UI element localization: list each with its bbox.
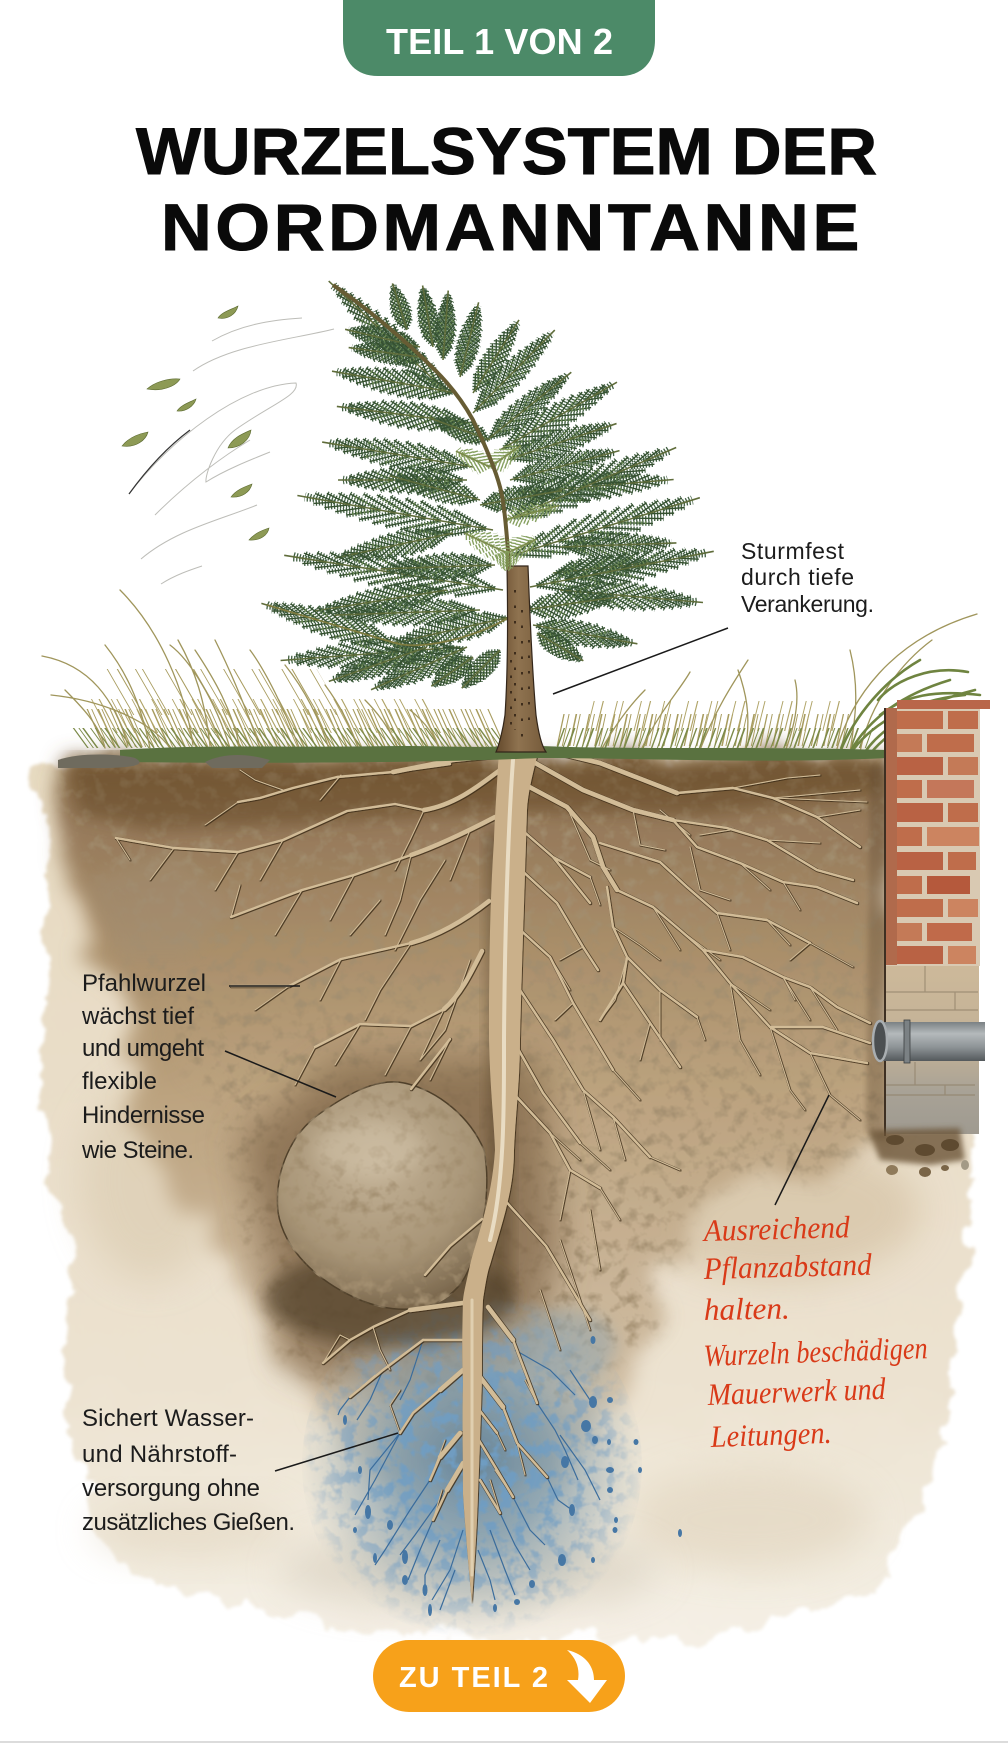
- callout: warning in red handwriting: [701, 1095, 928, 1454]
- callout: wasser und naehrstoffe: und Nährstoff-: [82, 1441, 237, 1468]
- taproot: [462, 745, 540, 1603]
- drain pipe: [873, 1020, 985, 1063]
- fine rootlets: [116, 770, 867, 1520]
- callout: warning in red handwriting: Wurzeln beschädigen: [703, 1330, 928, 1373]
- callout: wasser und naehrstoffe: versorgung ohne: [82, 1475, 260, 1502]
- callout: sturmfest: durch tiefe: [741, 564, 854, 590]
- root system: [116, 745, 870, 1603]
- callout: pfahlwurzel: Pfahlwurzel: [82, 970, 206, 997]
- title banner tab: [343, 0, 655, 76]
- callout: sturmfest: Verankerung.: [741, 591, 874, 617]
- callout: warning in red handwriting: Ausreichend: [701, 1209, 851, 1248]
- button: zu teil 2: ZU TEIL 2: [399, 1662, 548, 1694]
- soil clumps under wall: [868, 1128, 969, 1177]
- ground surface band: [58, 746, 888, 768]
- blue groundwater wash: [302, 1287, 642, 1643]
- title: WURZELSYSTEM DER: [136, 114, 877, 188]
- blue water rootlets and droplets: [338, 1336, 682, 1616]
- callout: pfahlwurzel: flexible: [82, 1068, 157, 1095]
- soil illustration: watercolor ground: [38, 750, 975, 1640]
- callout: wasser und naehrstoffe: zusätzliches Gießen.: [82, 1509, 295, 1536]
- callout: warning in red handwriting: Pflanzabstand: [702, 1247, 873, 1286]
- callout: pfahlwurzel: [81, 970, 336, 1164]
- stone: [265, 1082, 515, 1346]
- callout: warning in red handwriting: Leitungen.: [709, 1415, 832, 1454]
- title banner tab: TEIL 1 VON 2: [386, 21, 613, 62]
- callout: pfahlwurzel: wächst tief: [81, 1003, 194, 1030]
- button: zu teil 2: [373, 1640, 625, 1712]
- callout: pfahlwurzel: wie Steine.: [81, 1137, 194, 1164]
- callout: sturmfest: [553, 538, 874, 694]
- fir tree crown: [258, 271, 717, 701]
- callout: sturmfest: Sturmfest: [741, 538, 845, 564]
- brick wall: [884, 700, 990, 1136]
- callout: wasser und naehrstoffe: Sichert Wasser-: [82, 1405, 254, 1432]
- title: [136, 114, 877, 264]
- grass right: [560, 614, 980, 754]
- callout: warning in red handwriting: halten.: [704, 1291, 790, 1327]
- bottom edge line: [0, 1741, 1008, 1743]
- callout: wasser und naehrstoffe: [82, 1405, 398, 1536]
- trunk: [459, 522, 546, 752]
- grass left: [42, 590, 500, 752]
- callout: warning in red handwriting: Mauerwerk und: [706, 1371, 887, 1412]
- title: NORDMANNTANNE: [161, 190, 863, 264]
- callout: pfahlwurzel: Hindernisse: [82, 1102, 205, 1129]
- wind streaks and leaves: [122, 306, 334, 584]
- callout: pfahlwurzel: und umgeht: [82, 1035, 204, 1062]
